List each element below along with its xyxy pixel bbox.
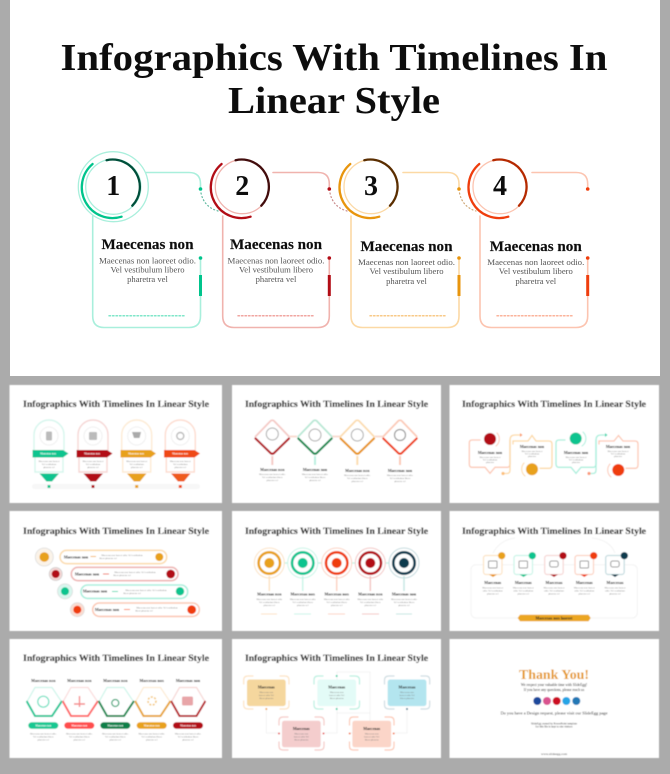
step 3 body text: Vel vestibulum libero bbox=[370, 266, 444, 276]
thank you heading: Thank You! bbox=[519, 667, 589, 682]
diamond 3: Maecenas non laoreet odio. bbox=[344, 474, 371, 477]
circle step 1: Maecenas non bbox=[257, 592, 282, 596]
hexagon 2: Vel vestibulum libero bbox=[69, 736, 90, 738]
hexagon 3: Maecenas non bbox=[107, 724, 124, 728]
circle step 3: Maecenas non bbox=[325, 592, 350, 596]
pill 1: libero pharetra vel bbox=[99, 557, 117, 560]
thumbnail: flow boxes slide bbox=[232, 639, 441, 758]
thumbnail: pin arrows slide bbox=[10, 385, 222, 503]
flow box 2 bbox=[314, 675, 360, 710]
hexagon 1: pharetra vel bbox=[38, 738, 49, 742]
flow box 1: laoreet odio Vel bbox=[259, 694, 274, 697]
hexagon 4: Maecenas non bbox=[140, 678, 165, 683]
step 2 body text bbox=[228, 256, 324, 284]
icon card 5: odio. Vel vestibulum bbox=[605, 590, 625, 592]
circle step 2 bbox=[288, 548, 318, 614]
pin 4 bbox=[164, 420, 200, 488]
flow box 1: Maecenas bbox=[258, 684, 275, 690]
flow box 4: laoreet odio Vel bbox=[294, 736, 309, 738]
thumbnail: icon cards slide bbox=[450, 511, 659, 631]
step 3 body text: pharetra vel bbox=[386, 276, 428, 286]
icon card 1 bbox=[482, 552, 505, 596]
circle step 3: Maecenas non laoreet odio bbox=[324, 598, 350, 601]
pill 2: Maecenas non laoreet odio. Vel vestibulum bbox=[114, 571, 156, 574]
path box 1: Vel vestibulum bbox=[483, 458, 497, 462]
circle step 1 bbox=[254, 548, 284, 614]
pill 1: Maecenas non bbox=[64, 554, 89, 560]
step 1 body text: Vel vestibulum libero bbox=[110, 264, 184, 274]
icon card 2: odio. Vel vestibulum bbox=[513, 590, 533, 592]
circle step 4: Maecenas non bbox=[358, 592, 383, 596]
box connectors bbox=[266, 672, 407, 733]
circle step 4: Vel vestibulum libero bbox=[360, 601, 381, 604]
hexagon 2 bbox=[63, 678, 98, 742]
step 4 body text bbox=[487, 257, 584, 286]
icon card 1: Maecenas non laoreet bbox=[482, 586, 503, 590]
thumbnail title: Infographics With Timelines In Linear Style bbox=[245, 653, 429, 664]
thumbnail: hexagons slide bbox=[10, 639, 222, 758]
hexagon 2: Maecenas non laoreet odio. bbox=[66, 732, 93, 736]
diamond 1: Maecenas non bbox=[260, 467, 285, 472]
flow box 3: laoreet odio Vel bbox=[399, 694, 415, 697]
thumbnail: concentric circles slide bbox=[232, 511, 441, 631]
icon card 3 bbox=[544, 552, 567, 596]
icon card 5: pharetra vel bbox=[609, 592, 621, 596]
bottom banner bbox=[518, 615, 591, 621]
pin 2 bbox=[76, 420, 112, 488]
step 4 card bbox=[468, 160, 590, 328]
diamond 2 bbox=[298, 420, 332, 482]
diamond 2: pharetra vel bbox=[309, 479, 321, 482]
step 1 body text: pharetra vel bbox=[127, 274, 169, 284]
flow box 3 bbox=[384, 676, 430, 710]
flow box 1: libero pharetra bbox=[259, 697, 274, 700]
pin 4: Maecenas non laoreet bbox=[170, 460, 191, 463]
circle step 2: Vel vestibulum libero bbox=[292, 601, 314, 604]
path box 3: Maecenas non laoreet bbox=[566, 456, 587, 459]
icon card 2 bbox=[513, 552, 536, 596]
hexagon 5 bbox=[172, 678, 205, 742]
hexagon 4: Maecenas non laoreet odio. bbox=[139, 732, 165, 736]
thumbnail: diamonds slide bbox=[232, 385, 441, 503]
pin 3: Maecenas non bbox=[128, 452, 144, 456]
icon card 4 bbox=[574, 552, 597, 596]
thank you message: We respect your valuable time with SlideEgg! bbox=[521, 683, 587, 687]
step 2 number ring bbox=[211, 160, 269, 218]
path box 2: Maecenas non bbox=[520, 444, 545, 449]
icon card 4: Maecenas non laoreet bbox=[574, 586, 595, 590]
pill 4: libero pharetra vel bbox=[135, 610, 153, 612]
circle step 5: pharetra vel bbox=[398, 604, 410, 607]
hexagon 1: Maecenas non laoreet odio. bbox=[30, 732, 57, 736]
pill 3: Maecenas non laoreet odio. Vel vestibulum bbox=[125, 589, 167, 592]
flow box 5: libero pharetra bbox=[365, 738, 380, 742]
pill 4: Maecenas non laoreet odio. Vel vestibulum bbox=[136, 606, 178, 610]
thumbnail: thank you slide bbox=[450, 639, 659, 758]
pin 2: Maecenas non bbox=[84, 452, 100, 456]
design request line: Do you have a Design request, please visit our SlideEgg page bbox=[500, 712, 608, 716]
pin 2: Maecenas non laoreet bbox=[83, 460, 104, 463]
pin 3: pharetra vel bbox=[131, 466, 143, 469]
main slide bbox=[10, 0, 660, 376]
path box 3: pharetra bbox=[572, 461, 581, 464]
step 1 number ring: 1 bbox=[106, 171, 120, 202]
circle step 2: Maecenas non laoreet odio bbox=[290, 598, 316, 601]
thumbnail title: Infographics With Timelines In Linear Style bbox=[23, 399, 210, 410]
step 4 number ring bbox=[468, 160, 527, 218]
step 1 number ring bbox=[78, 152, 148, 222]
diamond 3 bbox=[341, 420, 374, 483]
pin 3: Maecenas non laoreet bbox=[126, 460, 147, 463]
path box 1 bbox=[469, 433, 510, 473]
pin 1: Maecenas non laoreet bbox=[39, 460, 60, 463]
flow box 3: Maecenas bbox=[399, 684, 416, 690]
circle step 4: Maecenas non laoreet odio bbox=[357, 598, 384, 601]
flow box 1: Maecenas non bbox=[259, 691, 274, 694]
pin 4: pharetra vel bbox=[175, 466, 186, 469]
bottom banner: Maecenas non laoreet bbox=[535, 615, 573, 620]
pill 2: Maecenas non bbox=[75, 572, 100, 576]
circle step 2: pharetra vel bbox=[297, 604, 309, 607]
circle step 5: Vel vestibulum libero bbox=[394, 601, 415, 604]
icon card 4: odio. Vel vestibulum bbox=[574, 590, 594, 592]
main title: Infographics With Timelines In bbox=[60, 37, 608, 79]
circle step 1: pharetra vel bbox=[264, 604, 275, 607]
pill 1: Maecenas non laoreet odio. Vel vestibulum bbox=[101, 554, 143, 557]
hexagon 5: Maecenas non laoreet odio. bbox=[175, 732, 202, 736]
hexagon 2: Maecenas non bbox=[67, 678, 92, 683]
disclaimer: SlideEgg owned by PowerPoint template bbox=[531, 722, 578, 726]
step 4 body text: pharetra vel bbox=[515, 276, 557, 286]
pill 2 bbox=[49, 567, 178, 581]
step 2 heading: Maecenas non bbox=[230, 237, 322, 253]
flow box 2: Maecenas bbox=[328, 684, 346, 690]
icon card 3: odio. Vel vestibulum bbox=[544, 590, 564, 592]
diamond 1: Vel vestibulum libero bbox=[262, 476, 283, 479]
diamond connectors bbox=[290, 436, 382, 438]
pin 3 bbox=[120, 420, 156, 488]
thumbnail: winding path slide bbox=[450, 385, 659, 503]
circle step 2: Maecenas non bbox=[291, 592, 316, 596]
path box 4: pharetra bbox=[614, 455, 623, 458]
diamond 3: Vel vestibulum libero bbox=[347, 477, 368, 480]
step 4 body text: Maecenas non laoreet odio. bbox=[487, 257, 584, 267]
icon card 1: pharetra vel bbox=[487, 592, 499, 596]
circle step 1: Maecenas non laoreet odio bbox=[256, 598, 283, 601]
hexagon 5: Maecenas non bbox=[176, 678, 201, 683]
hexagon 5: Maecenas non bbox=[180, 724, 196, 728]
icon card 5: Maecenas non laoreet bbox=[605, 586, 626, 590]
pin 1: pharetra vel bbox=[43, 466, 55, 469]
hexagon 5: Vel vestibulum libero bbox=[178, 736, 199, 738]
hexagon 2: Maecenas non bbox=[71, 724, 88, 728]
path box 3 bbox=[556, 432, 596, 473]
thumbnail title: Infographics With Timelines In Linear Style bbox=[462, 399, 647, 410]
thank you message bbox=[521, 683, 587, 693]
diamond 4: pharetra vel bbox=[394, 480, 406, 483]
path box 1: pharetra bbox=[486, 461, 495, 464]
pill 4 bbox=[70, 603, 199, 617]
pin 4: Vel vestibulum bbox=[173, 463, 188, 466]
flow box 2: libero pharetra bbox=[330, 697, 345, 700]
pill 3: libero pharetra vel bbox=[123, 592, 141, 595]
pin 2: pharetra vel bbox=[87, 466, 99, 469]
disclaimer bbox=[531, 722, 578, 728]
pin 4: Maecenas non bbox=[172, 452, 188, 456]
hexagon 4: Maecenas non bbox=[144, 724, 160, 728]
social icons bbox=[533, 697, 580, 705]
thumbnail: stacked pills slide bbox=[10, 511, 222, 631]
icon card 3: Maecenas non laoreet bbox=[544, 586, 565, 590]
flow box 5: Maecenas non bbox=[365, 732, 379, 736]
step 3 body text: Maecenas non laoreet odio. bbox=[358, 257, 455, 267]
step 2 card bbox=[211, 160, 347, 328]
diamond 2: Maecenas non bbox=[303, 467, 328, 472]
step 1 body text bbox=[99, 256, 196, 284]
pill 3 bbox=[58, 584, 188, 599]
main title: Linear Style bbox=[228, 80, 440, 122]
flow box 2: Maecenas non bbox=[330, 691, 344, 694]
circle step 5: Maecenas non bbox=[392, 592, 417, 596]
flow box 4: libero pharetra bbox=[294, 738, 309, 742]
flow box 5: laoreet odio Vel bbox=[364, 736, 380, 738]
main title bbox=[60, 37, 608, 122]
pin 1: Maecenas non bbox=[40, 452, 56, 456]
flow box 5 bbox=[349, 717, 395, 750]
hexagon 3: Maecenas non laoreet odio. bbox=[102, 732, 129, 736]
pin 3: Vel vestibulum bbox=[129, 463, 144, 466]
path box 4: Maecenas non laoreet bbox=[608, 450, 629, 453]
diamond 1: Maecenas non laoreet odio. bbox=[259, 473, 286, 476]
icon card 5: Maecenas bbox=[607, 580, 624, 585]
hexagon 4 bbox=[136, 678, 170, 742]
hexagon 2: pharetra vel bbox=[74, 738, 85, 742]
hexagon 4: Vel vestibulum libero bbox=[141, 736, 163, 738]
hexagon 5: pharetra vel bbox=[182, 738, 194, 742]
hexagon 3 bbox=[99, 678, 134, 742]
thumbnail title: Infographics With Timelines In Linear Style bbox=[23, 653, 210, 664]
step 4 heading: Maecenas non bbox=[490, 239, 582, 255]
pin 1: Vel vestibulum bbox=[42, 463, 56, 466]
hexagon 1: Maecenas non bbox=[31, 678, 56, 683]
hexagon 1: Vel vestibulum libero bbox=[33, 736, 54, 738]
pin 1 bbox=[32, 420, 68, 488]
thank you message: If you have any questions, please reach us bbox=[524, 688, 585, 693]
diamond 4 bbox=[383, 420, 417, 483]
circle step 3: pharetra vel bbox=[331, 604, 343, 607]
diamond 3: pharetra vel bbox=[352, 480, 363, 483]
diamond 2: Vel vestibulum libero bbox=[305, 476, 326, 479]
disclaimer: for this file is kept to site visitors bbox=[536, 726, 572, 728]
icon card 2: Maecenas non laoreet bbox=[513, 586, 534, 590]
path box 2: Maecenas non laoreet bbox=[522, 450, 543, 453]
flow box 4 bbox=[278, 717, 324, 750]
circle step 3 bbox=[322, 548, 352, 614]
path box 3: Maecenas non bbox=[564, 450, 589, 455]
circle step 4 bbox=[355, 548, 385, 614]
step 2 body text: pharetra vel bbox=[256, 274, 297, 284]
path box 4 bbox=[587, 433, 638, 477]
icon card 5 bbox=[605, 552, 628, 596]
step 3 number ring: 3 bbox=[364, 171, 378, 202]
step 2 number ring: 2 bbox=[235, 171, 249, 202]
step 2 body text: Maecenas non laoreet odio. bbox=[228, 256, 324, 266]
step 3 heading: Maecenas non bbox=[360, 239, 452, 255]
hexagon 4: pharetra vel bbox=[146, 738, 158, 742]
diamond 3: Maecenas non bbox=[345, 468, 370, 473]
thumbnail title: Infographics With Timelines In Linear Style bbox=[23, 526, 210, 537]
circle step 1: Vel vestibulum libero bbox=[259, 601, 280, 604]
thumbnail title: Infographics With Timelines In Linear Style bbox=[462, 526, 647, 537]
hexagon 3: Maecenas non bbox=[103, 678, 128, 683]
flow box 1 bbox=[244, 676, 289, 710]
hexagon 1: Maecenas non bbox=[35, 724, 52, 728]
flow box 4: Maecenas non bbox=[294, 732, 309, 736]
step 1 card bbox=[78, 152, 218, 328]
path box 4: Vel vestibulum bbox=[611, 452, 625, 456]
icon card 1: Maecenas bbox=[484, 580, 502, 585]
path box 2: pharetra bbox=[528, 455, 537, 458]
icon card 4: pharetra vel bbox=[579, 592, 590, 596]
step 4 number ring: 4 bbox=[493, 171, 507, 202]
flow box 3: Maecenas non bbox=[400, 691, 415, 694]
pill 2: libero pharetra vel bbox=[113, 574, 131, 577]
icon card 2: pharetra vel bbox=[518, 592, 529, 596]
step 3 card bbox=[339, 160, 476, 328]
circle step 3: Vel vestibulum libero bbox=[326, 601, 348, 604]
path box 1: Maecenas non bbox=[478, 450, 503, 455]
thumbnail title: Infographics With Timelines In Linear Style bbox=[245, 526, 429, 537]
flow box 5: Maecenas bbox=[363, 726, 381, 731]
icon card 3: Maecenas bbox=[546, 580, 563, 585]
pill 4: Maecenas non bbox=[95, 607, 120, 612]
step 1 body text: Maecenas non laoreet odio. bbox=[99, 256, 196, 266]
pill 3: Maecenas non bbox=[83, 588, 108, 594]
pin 2: Vel vestibulum bbox=[86, 463, 100, 466]
flow box 4: Maecenas bbox=[293, 726, 310, 731]
thumbnail title: Infographics With Timelines In Linear Style bbox=[245, 399, 429, 410]
diamond 4: Maecenas non laoreet odio. bbox=[387, 474, 414, 477]
icon card 4: Maecenas bbox=[576, 580, 593, 585]
diamond 1: pharetra vel bbox=[267, 479, 278, 482]
pill 1 bbox=[35, 548, 167, 566]
diamond 2: Maecenas non laoreet odio. bbox=[302, 473, 329, 476]
icon card 3: pharetra vel bbox=[548, 592, 560, 596]
step 3 body text bbox=[358, 257, 455, 286]
path box 3: Vel vestibulum bbox=[569, 458, 583, 462]
flow box 2: laoreet odio Vel bbox=[329, 694, 345, 697]
hexagon 3: pharetra vel bbox=[110, 738, 121, 742]
icon card 1: odio. Vel vestibulum bbox=[483, 590, 503, 592]
path box 2 bbox=[501, 433, 552, 476]
diamond 1 bbox=[256, 420, 289, 482]
circle step 5: Maecenas non laoreet odio bbox=[391, 598, 418, 601]
diamond 4: Vel vestibulum libero bbox=[390, 477, 411, 480]
hexagon 1 bbox=[27, 678, 62, 742]
flow box 3: libero pharetra bbox=[400, 697, 415, 700]
diamond 4: Maecenas non bbox=[388, 468, 413, 473]
circle step 5 bbox=[389, 548, 419, 614]
step 2 body text: Vel vestibulum libero bbox=[239, 264, 313, 274]
circle step connectors bbox=[284, 562, 389, 564]
path box 4: Maecenas non bbox=[606, 444, 631, 449]
step 1 heading: Maecenas non bbox=[102, 237, 194, 253]
icon card 2: Maecenas bbox=[515, 580, 532, 585]
path box 1: Maecenas non laoreet bbox=[480, 456, 501, 459]
step 4 body text: Vel vestibulum libero bbox=[499, 266, 573, 276]
hexagon 3: Vel vestibulum libero bbox=[105, 736, 126, 738]
path box 2: Vel vestibulum bbox=[525, 452, 539, 456]
step 3 number ring bbox=[339, 160, 398, 218]
connector frame bbox=[471, 538, 637, 618]
website address: www.slideegg.com bbox=[541, 752, 567, 756]
circle step 4: pharetra vel bbox=[365, 604, 376, 607]
